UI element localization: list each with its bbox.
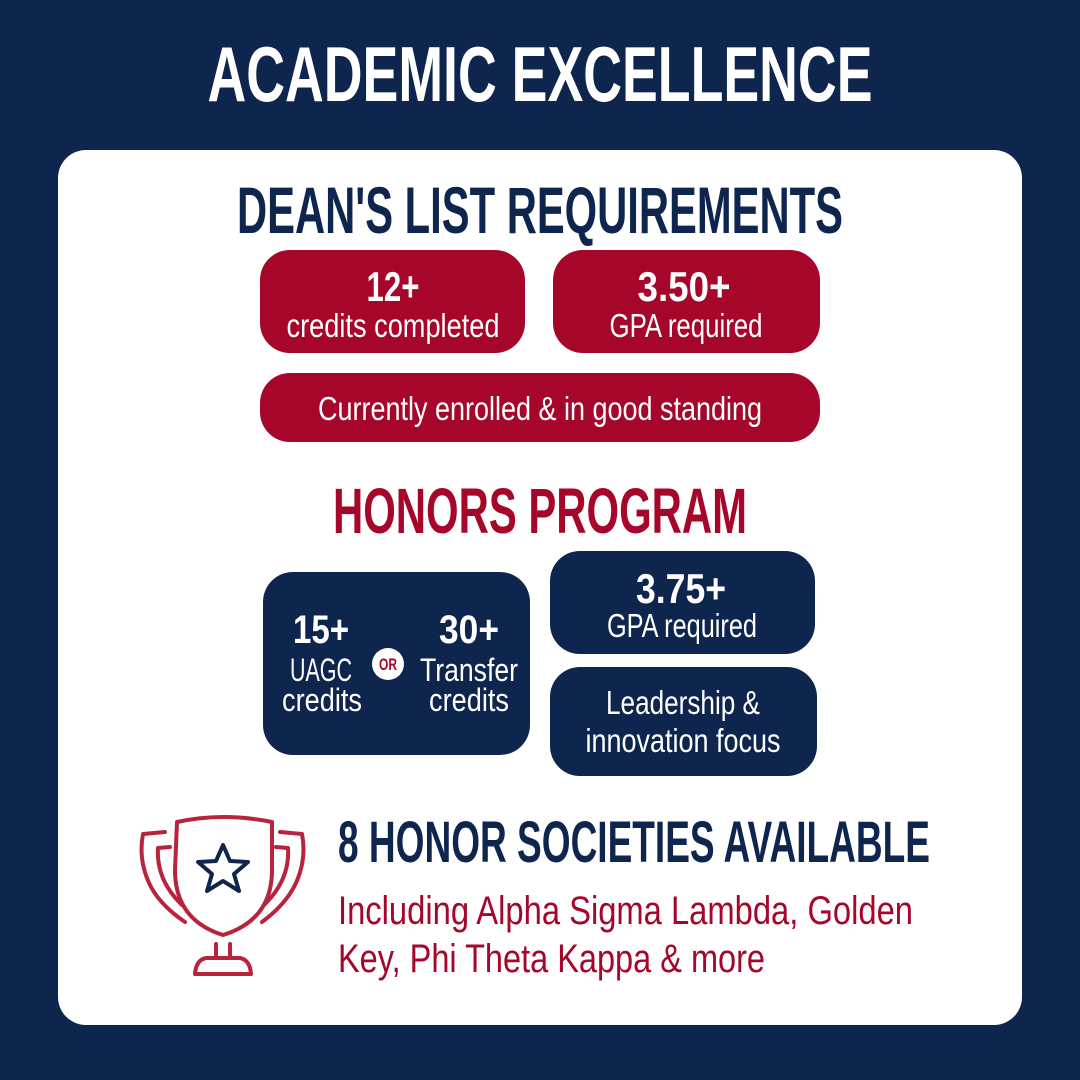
box: leadership	[550, 667, 817, 776]
box: 3.75+ GPA	[550, 551, 815, 654]
heading: honors program: HONORS PROGRAM	[333, 475, 747, 547]
text: societies list	[338, 889, 913, 981]
text: societies list: Including Alpha Sigma Lambda, Golden	[338, 889, 913, 933]
box: credits: UAGC	[290, 652, 352, 688]
pill: enrolled	[260, 373, 820, 442]
pill: 12+ credits	[260, 250, 525, 353]
box: credits: Transfer	[420, 652, 518, 688]
box: credits: credits	[429, 682, 509, 718]
box: credits	[263, 572, 530, 755]
box: credits: 15+	[293, 608, 349, 652]
badge: OR: OR	[379, 655, 397, 674]
pill: 12+ credits: 12+	[366, 263, 420, 310]
icon: trophy	[142, 817, 303, 974]
box: 3.75+ GPA: 3.75+	[636, 565, 726, 612]
pill: 3.50+ GPA	[553, 250, 820, 353]
text: societies list: Key, Phi Theta Kappa & more	[338, 937, 765, 981]
pill: 3.50+ GPA: GPA required	[610, 307, 762, 344]
pill: enrolled: Currently enrolled & in good standing	[318, 390, 762, 427]
badge: OR	[372, 648, 404, 680]
box: leadership: Leadership &	[606, 684, 760, 721]
box: credits: credits	[282, 682, 362, 718]
pill: 3.50+ GPA: 3.50+	[638, 263, 730, 310]
box: leadership: innovation focus	[586, 722, 780, 759]
box: 3.75+ GPA: GPA required	[607, 607, 757, 644]
pill: 12+ credits: credits completed	[286, 307, 500, 344]
box: credits: 30+	[439, 608, 499, 652]
panel: main white card	[58, 150, 1022, 1025]
